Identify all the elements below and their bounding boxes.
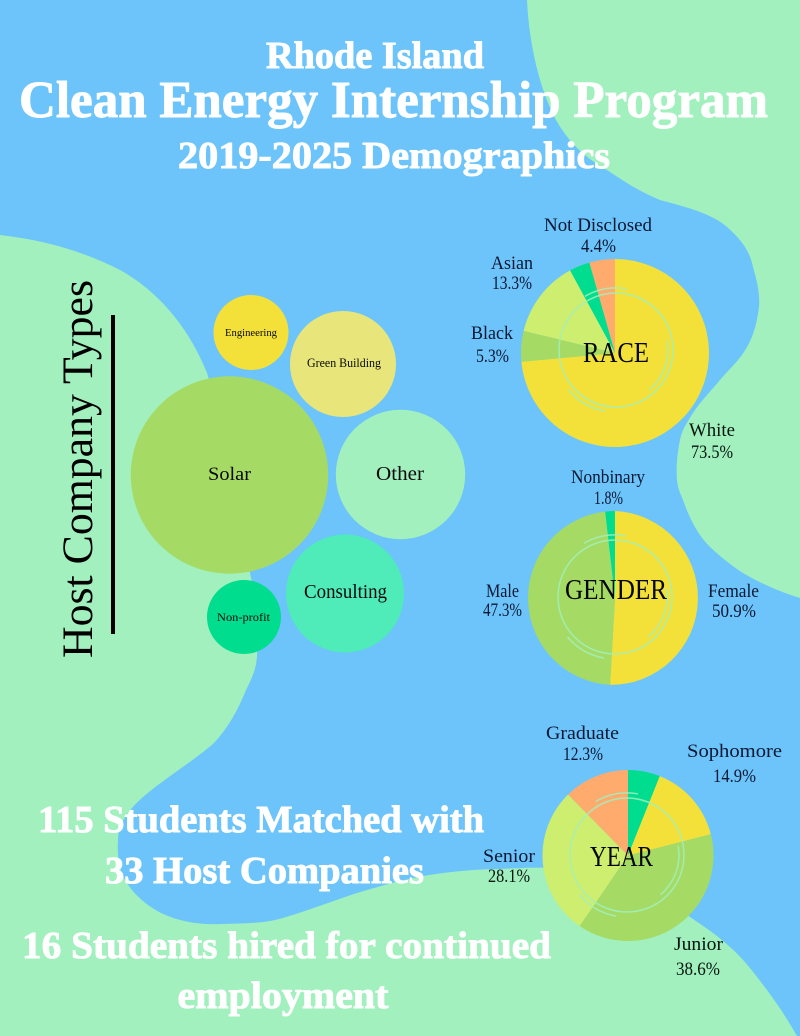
background blob: left and bottom	[0, 235, 797, 1036]
labels: year: Sophomore	[687, 741, 782, 762]
bubble: non-profit	[207, 580, 281, 654]
labels: year: 28.1%	[488, 866, 530, 887]
pie chart: gender: GENDER	[565, 574, 668, 606]
labels: year: Junior	[674, 934, 724, 955]
labels: race: 5.3%	[476, 346, 509, 367]
bubble: solar	[131, 376, 328, 574]
pie chart: race: RACE	[583, 337, 649, 369]
labels: gender: Female	[708, 581, 759, 602]
bubble: other: Other	[376, 463, 424, 485]
labels: race: Black	[471, 323, 513, 344]
labels: year: Senior	[483, 846, 536, 867]
labels: race: White	[689, 420, 735, 441]
labels: gender	[483, 467, 759, 622]
labels: year: Graduate	[546, 723, 619, 744]
labels: year: 14.9%	[713, 766, 756, 787]
labels: race: 13.3%	[492, 273, 532, 294]
labels: year: 38.6%	[676, 959, 720, 980]
labels: gender: 47.3%	[483, 600, 522, 621]
title: 2019-2025 Demographics	[178, 135, 610, 177]
stat: students matched: 115 Students Matched with	[38, 799, 484, 841]
bubble: solar: Solar	[208, 464, 252, 485]
bubble: green building: Green Building	[307, 355, 381, 370]
labels: race: Asian	[491, 253, 533, 274]
pie chart: race	[521, 259, 709, 447]
labels: race: Not Disclosed	[544, 215, 652, 236]
stat: students matched	[38, 799, 484, 892]
title: Clean Energy Internship Program	[19, 72, 768, 129]
heading: host company types: Host Company Types	[55, 280, 102, 658]
pie chart: year: YEAR	[590, 841, 654, 873]
stat: students hired	[22, 925, 551, 1017]
stat: students hired: employment	[178, 975, 389, 1017]
bubble chart: host company types	[131, 295, 465, 654]
bubble: green building	[290, 311, 396, 417]
labels: race: 4.4%	[581, 236, 616, 257]
bubble: non-profit: Non-profit	[217, 610, 271, 624]
bubble: consulting: Consulting	[304, 581, 387, 603]
title: Rhode Island	[266, 35, 484, 77]
labels: race: 73.5%	[691, 442, 733, 463]
title	[19, 35, 768, 177]
stat: students hired: 16 Students hired for continued	[22, 925, 551, 967]
bubble: engineering	[214, 295, 288, 370]
labels: gender: 1.8%	[594, 488, 623, 509]
stat: students matched: 33 Host Companies	[105, 850, 424, 892]
labels: gender: Male	[486, 581, 519, 602]
pie chart: year	[542, 770, 714, 941]
labels: year: 12.3%	[563, 744, 603, 765]
labels: year	[483, 723, 782, 980]
background blob: top right	[527, 0, 800, 598]
labels: race	[471, 215, 735, 463]
pie chart: gender	[528, 511, 698, 685]
labels: gender: 50.9%	[712, 601, 756, 622]
bubble: engineering: Engineering	[225, 327, 277, 339]
labels: gender: Nonbinary	[571, 467, 645, 488]
bubble: consulting	[286, 534, 404, 652]
bubble: other	[336, 410, 465, 539]
